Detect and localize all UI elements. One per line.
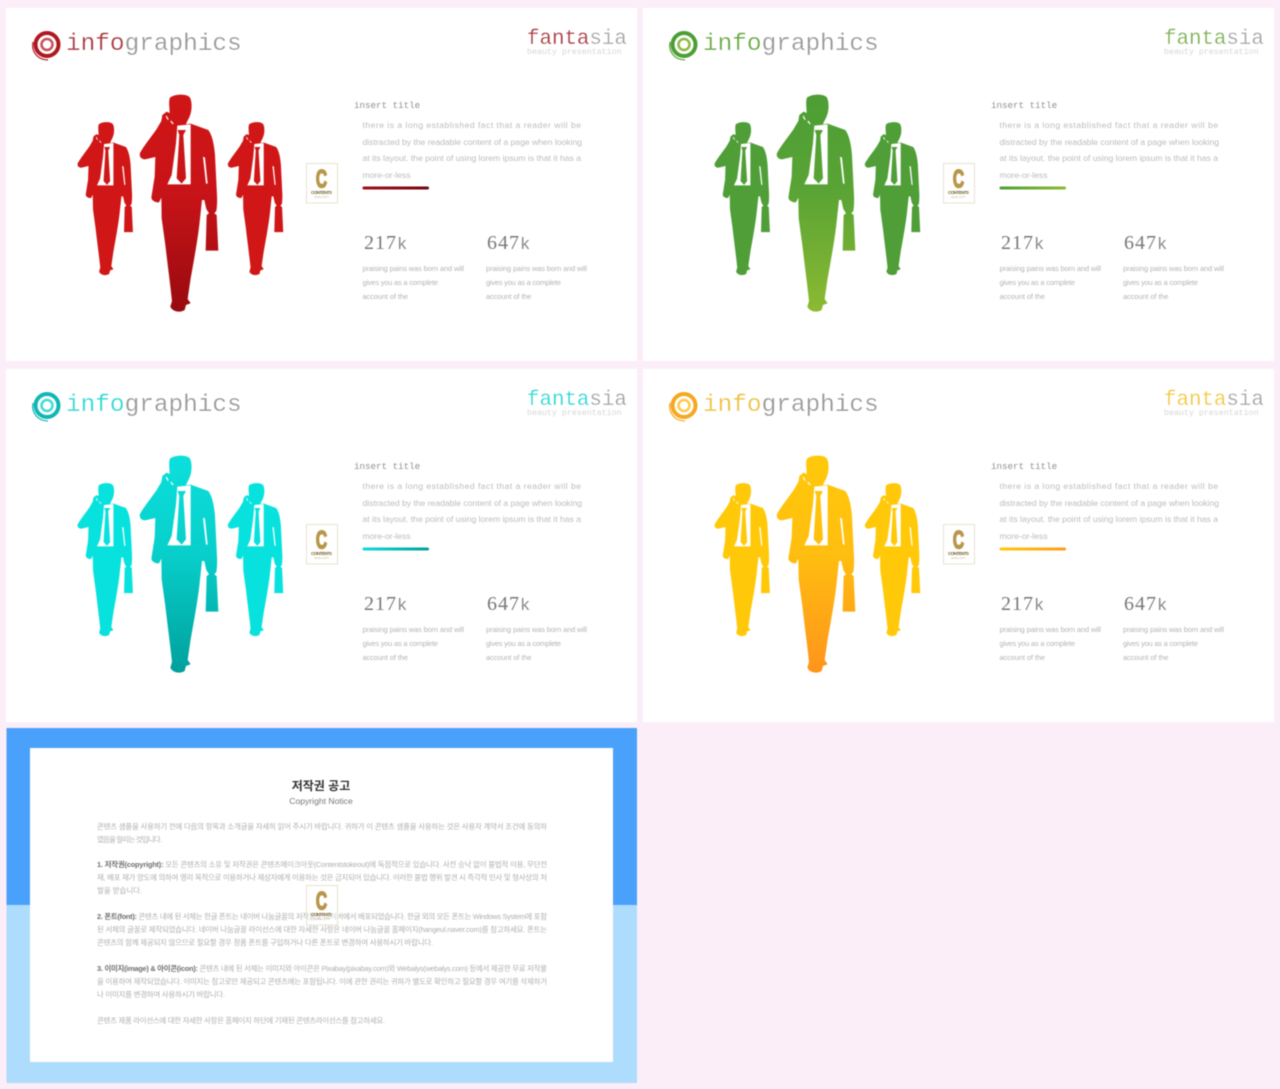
stat: 647k: praising pains was born and will — [1123, 625, 1224, 634]
text block: font clause: 2. 폰트(font): 콘텐츠 내에 된 서체는 한글 폰트는 네이버 나눔글꼴의 저작물로 네이버에서 배포되었습니다. 한글 외의 모든 폰트는 Windows System에 포함 — [97, 912, 547, 921]
figures: three businessmen — [715, 456, 920, 673]
text block: intro: 콘텐츠 샘플을 사용하기 전에 다음의 항목과 소개글을 자세히 읽어 주시기 바랍니다. 귀하가 이 콘텐츠 샘플을 사용하는 것은 사용자 계약서 조건에 동의하 — [97, 822, 547, 831]
text block: insert title: there is a long established fact that a reader will be — [1000, 120, 1218, 130]
stat: 647k: 647k — [1124, 593, 1167, 616]
stat: 217k: account of the — [1000, 292, 1045, 301]
text block: insert title: distracted by the readable content of a page when looking — [362, 137, 582, 147]
text block: license note: 콘텐츠 제품 라이선스에 대한 자세한 사항은 홈페이지 하단에 기재된 콘텐츠라이선스를 참고하세요. — [97, 1016, 385, 1025]
watermark badge: MAKE COPY — [951, 557, 966, 560]
text block: image and icon clause: 을 이용하여 제작되었습니다. 이미지는 참고로만 제공되고 콘텐츠에는 포함됩니다. 이에 관한 권리는 귀하가 별도로 확인하고 필요할 경우 여기를 삭제하거 — [97, 977, 547, 986]
figures: three businessmen — [78, 456, 283, 673]
text block: insert title — [354, 461, 582, 541]
stat: 217k — [362, 593, 464, 662]
watermark badge — [944, 524, 974, 564]
stat: 217k: gives you as a complete — [1000, 278, 1075, 287]
text block: insert title: at its layout. the point of using lorem ipsum is that it has a — [1000, 153, 1218, 163]
brand: fantasia: beauty presentation — [1164, 408, 1259, 418]
stat: 647k: 647k — [1124, 232, 1167, 255]
brand: fantasia: fantasia — [527, 389, 627, 412]
brand: fantasia: beauty presentation — [527, 47, 622, 57]
stat: 647k — [1123, 593, 1224, 662]
stat: 647k: account of the — [1123, 653, 1168, 662]
watermark badge — [306, 524, 338, 564]
stat: 647k: gives you as a complete — [1123, 639, 1198, 648]
watermark badge: CONTENTS — [948, 551, 969, 556]
stat: 217k: gives you as a complete — [362, 278, 438, 287]
text block: insert title: there is a long established fact that a reader will be — [1000, 481, 1218, 491]
text block: insert title: insert title — [354, 461, 420, 472]
stat: 647k: praising pains was born and will — [486, 625, 587, 634]
heading: infographics: infographics — [703, 31, 879, 58]
watermark badge — [944, 164, 974, 203]
icon: green spiral logo — [670, 33, 696, 60]
panel: red infographic — [6, 8, 637, 361]
stat: 647k: account of the — [1123, 292, 1168, 301]
stat: 217k — [362, 232, 464, 301]
panel: green infographic — [643, 8, 1274, 361]
heading: infographics: infographics — [66, 31, 242, 58]
text block: insert title: more-or-less — [362, 170, 410, 180]
text block: copyright clause: 1. 저작권(copyright): 모든 콘텐츠의 소유 및 저작권은 콘텐츠메이크아웃(Contentstokeout)에 독점적으로 있습니다. 사전 승낙 없이 불법적 이용, 무단전 — [97, 860, 547, 869]
text block: insert title: more-or-less — [1000, 170, 1048, 180]
watermark badge: CONTENTS — [311, 190, 332, 195]
heading: infographics: infographics — [703, 392, 879, 419]
stat: 217k: gives you as a complete — [362, 639, 438, 648]
watermark badge: MAKE COPY — [951, 196, 966, 199]
accent bar — [362, 186, 429, 190]
text block: intro — [97, 822, 547, 844]
figures: three businessmen — [715, 95, 920, 312]
accent bar — [1000, 548, 1066, 550]
icon: red spiral logo — [33, 33, 58, 60]
text block: image and icon clause — [97, 964, 547, 999]
stat: 647k: account of the — [486, 653, 532, 662]
figures: three businessmen — [78, 95, 283, 312]
text block: insert title: there is a long established fact that a reader will be — [362, 120, 581, 130]
heading: copyright notice: 저작권 공고 — [292, 778, 350, 793]
watermark badge — [306, 886, 338, 925]
stat: 217k: praising pains was born and will — [1000, 625, 1101, 634]
stat: 647k: gives you as a complete — [486, 639, 561, 648]
text block: insert title: distracted by the readable content of a page when looking — [1000, 137, 1219, 147]
watermark badge: CONTENTS — [311, 912, 332, 917]
text block: font clause: 콘텐츠의 함께 제공되지 않으므로 필요할 경우 정품 폰트를 구입하거나 다른 폰트로 변경하여 사용하시기 바랍니다. — [97, 938, 433, 947]
text block: insert title: insert title — [991, 461, 1057, 472]
text block: insert title: distracted by the readable content of a page when looking — [1000, 498, 1219, 508]
stat: 647k: 647k — [487, 593, 530, 616]
stat: 647k: gives you as a complete — [486, 278, 561, 287]
text block: insert title: there is a long established fact that a reader will be — [362, 481, 581, 491]
stat: 217k: praising pains was born and will — [362, 264, 464, 273]
text block: font clause — [97, 912, 547, 947]
text block: copyright clause: 벌을 받습니다. — [97, 886, 142, 895]
accent bar — [362, 548, 429, 550]
stat: 647k: account of the — [486, 292, 532, 301]
watermark badge: C — [316, 888, 327, 916]
stat: 217k: account of the — [362, 653, 408, 662]
text block: insert title: at its layout. the point of using lorem ipsum is that it has a — [1000, 514, 1218, 524]
watermark badge: MAKE COPY — [314, 196, 329, 199]
stat: 217k: praising pains was born and will — [1000, 264, 1101, 273]
stat: 217k — [1000, 232, 1101, 301]
stat: 217k: 217k — [1001, 232, 1044, 255]
watermark badge: MAKE COPY — [314, 918, 329, 921]
text block: insert title: insert title — [991, 100, 1057, 111]
text block: insert title — [354, 100, 582, 180]
stat: 647k — [486, 593, 587, 662]
brand: fantasia: fantasia — [527, 28, 627, 51]
text block: insert title — [991, 461, 1219, 541]
text block: intro: 였음을 알리는 것입니다. — [97, 835, 162, 844]
text block: insert title: distracted by the readable content of a page when looking — [362, 498, 582, 508]
watermark badge: C — [953, 527, 964, 555]
stat: 217k: gives you as a complete — [1000, 639, 1075, 648]
stat: 217k — [1000, 593, 1101, 662]
watermark badge: C — [953, 166, 964, 194]
text block: insert title: insert title — [354, 100, 420, 111]
text block: insert title: more-or-less — [1000, 531, 1048, 541]
brand: fantasia: beauty presentation — [1164, 47, 1259, 57]
text block: insert title: at its layout. the point of using lorem ipsum is that it has a — [362, 514, 581, 524]
text block: copyright clause: 재, 배포 재가 양도에 의하여 영리 목적으로 이용하거나 제삼자에게 이용하는 것은 금지되어 있습니다. 이러한 불법 행위 발견 시 즉각적 민사 및 형사상의 처 — [97, 873, 547, 882]
watermark badge: CONTENTS — [311, 551, 332, 556]
stat: 647k — [1123, 232, 1224, 301]
watermark badge — [306, 164, 338, 203]
stat: 217k: account of the — [1000, 653, 1045, 662]
text block: font clause: 된 서체의 글꼴로 제작되었습니다. 네이버 나눔글꼴 라이선스에 대한 자세한 사항은 네이버 나눔글꼴 홈페이지(hangeul.naver.com)를 참고하세요. 폰트는 — [97, 925, 547, 934]
stat: 647k: 647k — [487, 232, 530, 255]
text block: insert title — [991, 100, 1219, 180]
panel: copyright notice — [6, 728, 637, 1083]
panel: yellow infographic — [643, 369, 1274, 722]
stat: 217k: 217k — [364, 593, 407, 616]
watermark badge: CONTENTS — [948, 190, 969, 195]
watermark badge: C — [316, 527, 327, 555]
text block: copyright clause — [97, 860, 547, 895]
icon: yellow spiral logo — [670, 394, 696, 421]
heading: copyright notice — [289, 778, 353, 806]
brand: fantasia: beauty presentation — [527, 408, 622, 418]
stat: 217k: account of the — [362, 292, 408, 301]
watermark badge: C — [316, 166, 327, 194]
panel: cyan infographic — [6, 369, 637, 722]
stat: 647k — [486, 232, 587, 301]
stat: 647k: gives you as a complete — [1123, 278, 1198, 287]
text block: image and icon clause: 3. 이미지(image) & 아이콘(icon): 콘텐츠 내에 된 서체는 이미지와 아이콘은 Pixabay(pixabay.com)와 Webalys(webalys.com) 등에서 제공한 무료 저작물 — [97, 964, 547, 973]
text block: insert title: more-or-less — [362, 531, 410, 541]
stat: 217k: 217k — [1001, 593, 1044, 616]
stat: 217k: 217k — [364, 232, 407, 255]
icon: cyan spiral logo — [33, 394, 58, 421]
stat: 647k: praising pains was born and will — [1123, 264, 1224, 273]
watermark badge: MAKE COPY — [314, 557, 329, 560]
stat: 647k: praising pains was born and will — [486, 264, 587, 273]
heading: copyright notice: Copyright Notice — [289, 796, 353, 806]
heading: infographics: infographics — [66, 392, 242, 419]
text block: insert title: at its layout. the point of using lorem ipsum is that it has a — [362, 153, 581, 163]
brand: fantasia: fantasia — [1164, 389, 1264, 412]
stat: 217k: praising pains was born and will — [362, 625, 464, 634]
text block: image and icon clause: 나 이미지를 변경하여 사용하시기 바랍니다. — [97, 990, 225, 999]
brand: fantasia: fantasia — [1164, 28, 1264, 51]
accent bar — [1000, 186, 1066, 190]
